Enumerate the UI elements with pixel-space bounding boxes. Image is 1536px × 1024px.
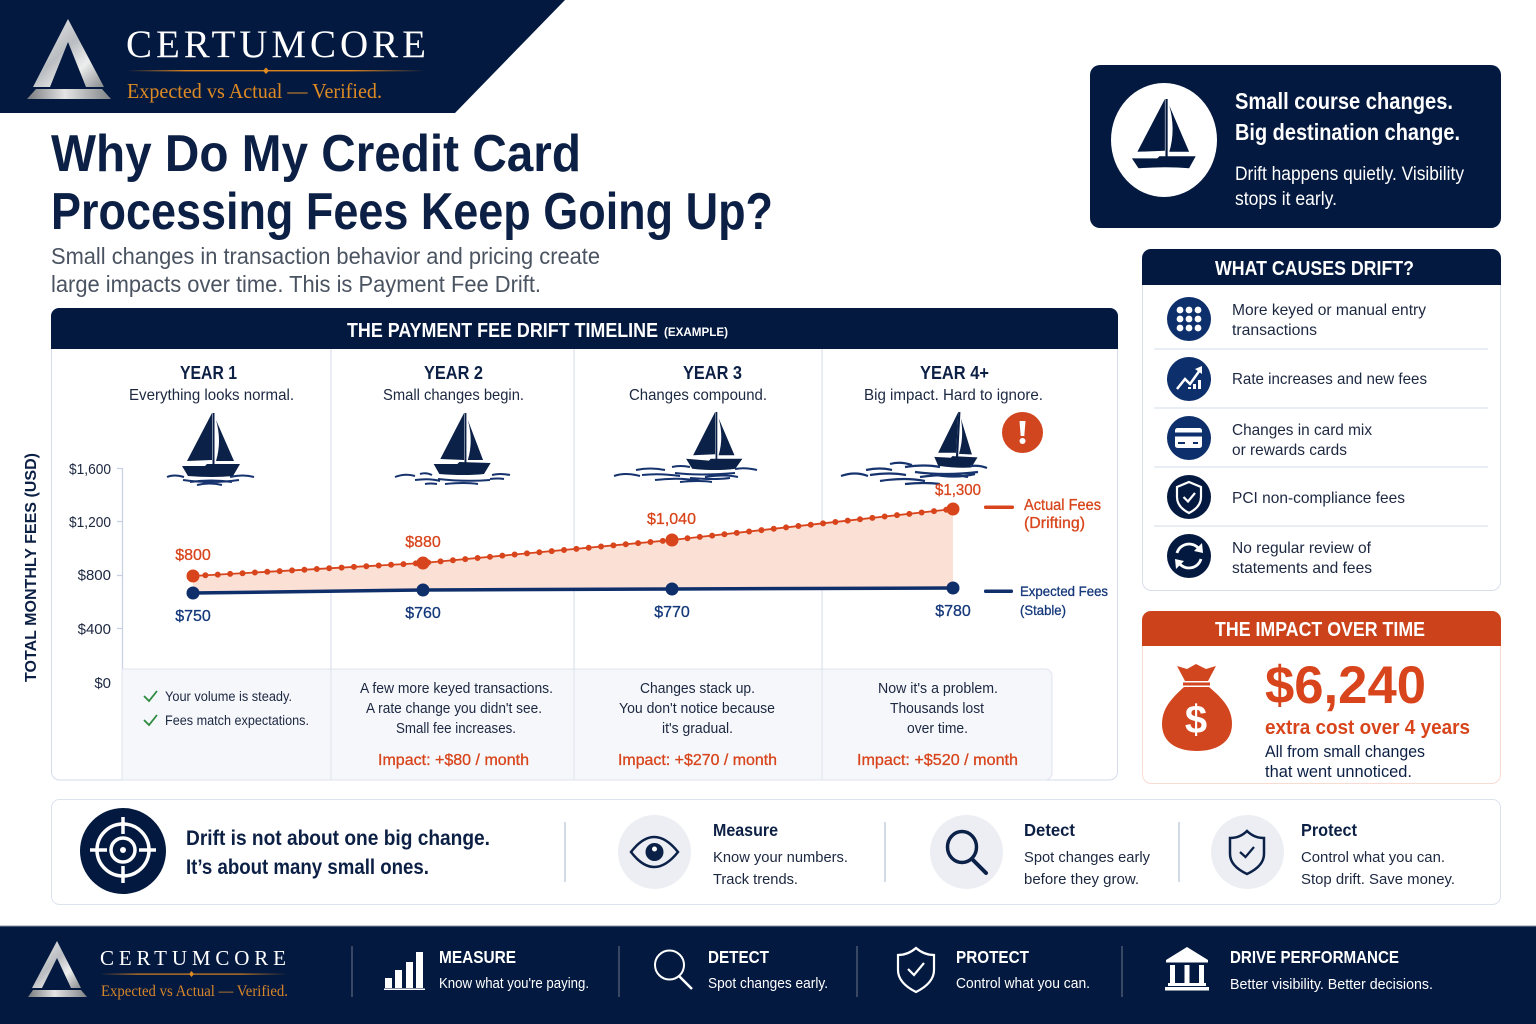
actual fee values [175,482,981,564]
year 3 heading: YEAR 3 [683,363,742,383]
cause: rate increases [1167,357,1427,401]
year 1 heading: Everything looks normal. [129,387,294,404]
y-axis: $0 [94,675,111,692]
cause: keyed entry [1167,297,1426,341]
year 1 heading: YEAR 1 [180,363,237,383]
legend: actual fees: (Drifting) [1024,515,1085,532]
footer drive performance [1165,947,1433,993]
timeline heading: THE PAYMENT FEE DRIFT TIMELINE [347,320,658,342]
impact text [1265,743,1425,781]
icon: alert [1002,412,1043,453]
impact text: that went unnoticed. [1265,763,1412,781]
cause: card mix [1167,416,1372,460]
header banner [0,0,565,113]
footer protect: Control what you can. [956,976,1090,992]
year 3 note: it's gradual. [662,721,733,737]
year 2 heading: YEAR 2 [424,363,483,383]
y-axis [69,461,122,692]
actual fee values: $1,040 [647,511,696,528]
cause: card mix: Changes in card mix [1232,422,1372,439]
icon: money bag: $ [1185,698,1207,742]
protect item: Control what you can. [1301,849,1445,866]
year 4 note: Impact: +$520 / month [857,752,1018,769]
logo mark [27,19,111,99]
takeaway text: It’s about many small ones. [186,855,429,879]
actual fee values: $800 [175,547,211,564]
footer detect [655,947,828,992]
panel heading: WHAT CAUSES DRIFT? [1215,258,1414,280]
footer [0,926,1536,1024]
year 2 note [360,681,553,769]
icon: boat year 3 [614,412,757,482]
line: actual fees [186,502,960,582]
brand rule [127,68,425,74]
protect item: Stop drift. Save money. [1301,871,1455,888]
cause: keyed entry: More keyed or manual entry [1232,302,1426,319]
expected fee values: $770 [654,604,690,621]
protect item: Protect [1301,820,1357,840]
chart: monthly fees [23,453,1108,692]
y-axis: $1,600 [69,461,111,478]
cause: no review [1167,534,1372,578]
timeline heading: (EXAMPLE) [664,325,728,339]
cause: no review: statements and fees [1232,560,1372,577]
footer drive performance: Better visibility. Better decisions. [1230,977,1433,993]
panel: payment fee drift timeline [23,308,1118,780]
tagline: Expected vs Actual — Verified. [127,79,382,103]
year 4 heading: YEAR 4+ [920,363,989,383]
icon: boat year 2 [395,413,510,484]
title: Processing Fees Keep Going Up? [51,183,773,241]
subtitle [51,243,600,297]
big number: $6,240 [1265,656,1426,715]
footer logo: Expected vs Actual — Verified. [101,983,288,1000]
panel: impact over time [1142,611,1501,784]
footer drive performance: DRIVE PERFORMANCE [1230,947,1399,967]
year 2 note: A few more keyed transactions. [360,681,553,697]
footer protect [898,947,1090,992]
brand name: CERTUMCORE [126,23,426,66]
detect item: Spot changes early [1024,849,1150,866]
year 3 note: Impact: +$270 / month [618,752,777,769]
footer logo [28,941,288,1000]
y-axis: $1,200 [69,514,111,531]
measure item [618,815,848,889]
year 2 note: Impact: +$80 / month [378,752,529,769]
year 2 note: A rate change you didn't see. [366,701,542,717]
detect item: before they grow. [1024,871,1139,888]
year 3 heading: Changes compound. [629,387,767,404]
impact text: All from small changes [1265,743,1425,761]
year 2 note: Small fee increases. [396,721,516,737]
protect item [1211,815,1455,889]
actual fee values: $1,300 [935,482,981,499]
measure item: Know your numbers. [713,849,848,866]
expected fee values: $780 [935,603,971,620]
y-axis title: TOTAL MONTHLY FEES (USD) [23,453,40,682]
expected fee values: $760 [405,605,441,622]
year 2 heading: Small changes begin. [383,387,524,404]
subtitle: large impacts over time. This is Payment Fee Drift. [51,271,541,297]
takeaway text [186,826,490,879]
callout text [1235,164,1464,210]
footer protect: PROTECT [956,947,1029,967]
year 4 heading [864,363,1043,404]
line: expected fees [186,582,960,600]
measure item: Measure [713,820,778,840]
icon: sailboat in circle [1111,83,1217,197]
callout text: Drift happens quietly. Visibility [1235,164,1464,185]
panel: key takeaway strip [52,800,1500,904]
footer detect: DETECT [708,947,769,967]
legend: expected fees: (Stable) [1020,602,1066,618]
year 2 heading [383,363,524,404]
footer logo: CERTUMCORE [100,946,286,970]
cause: no review: No regular review of [1232,540,1372,557]
actual fee values: $880 [405,534,441,551]
callout text: stops it early. [1235,189,1337,210]
footer detect: Spot changes early. [708,976,828,992]
year 1 note [144,689,309,728]
year 4 note: Thousands lost [890,701,984,717]
year 1 note: Fees match expectations. [165,713,309,728]
expected fee values: $750 [175,608,211,625]
year 4 note [857,681,1018,769]
cause: card mix: or rewards cards [1232,442,1347,459]
callout: small course changes [1090,65,1501,228]
y-axis: $800 [78,567,111,584]
footer measure [384,947,589,992]
title [51,125,773,241]
year 3 heading [629,363,767,404]
subtitle: Small changes in transaction behavior and pricing create [51,243,600,269]
cause: PCI fees [1167,475,1405,519]
cause: keyed entry: transactions [1232,322,1317,339]
detect item: Detect [1024,820,1075,840]
area: drift gap [193,509,953,593]
expected fee values [175,603,971,625]
legend: actual fees [984,497,1101,532]
year 3 note: You don't notice because [619,701,775,717]
icon: target [80,808,166,894]
year 1 heading [129,363,294,404]
year 3 note [618,681,777,769]
y-axis: $400 [78,621,111,638]
callout heading: Small course changes. [1235,88,1453,114]
panel heading: THE IMPACT OVER TIME [1215,619,1425,641]
year 3 note: Changes stack up. [640,681,755,697]
year 1 note: Your volume is steady. [165,689,292,704]
icon: boat year 4 [841,411,987,484]
impact label: extra cost over 4 years [1265,716,1470,739]
legend: expected fees [984,583,1108,618]
cause: rate increases: Rate increases and new fees [1232,371,1427,388]
footer measure: Know what you're paying. [439,976,589,992]
legend: actual fees: Actual Fees [1024,497,1101,514]
icon: boat year 1 [167,413,254,485]
icon: money bag [1162,664,1232,751]
measure item: Track trends. [713,871,798,888]
callout heading: Big destination change. [1235,119,1460,145]
year 4 note: Now it's a problem. [878,681,998,697]
notes strip [122,669,1052,780]
legend: expected fees: Expected Fees [1020,583,1108,599]
footer measure: MEASURE [439,947,516,967]
title: Why Do My Credit Card [51,125,581,183]
panel: what causes drift [1142,249,1501,590]
cause: PCI fees: PCI non-compliance fees [1232,490,1405,507]
takeaway text: Drift is not about one big change. [186,826,490,850]
callout heading [1235,88,1460,145]
detect item [930,815,1150,889]
year 4 note: over time. [907,721,968,737]
year 4 heading: Big impact. Hard to ignore. [864,387,1043,404]
